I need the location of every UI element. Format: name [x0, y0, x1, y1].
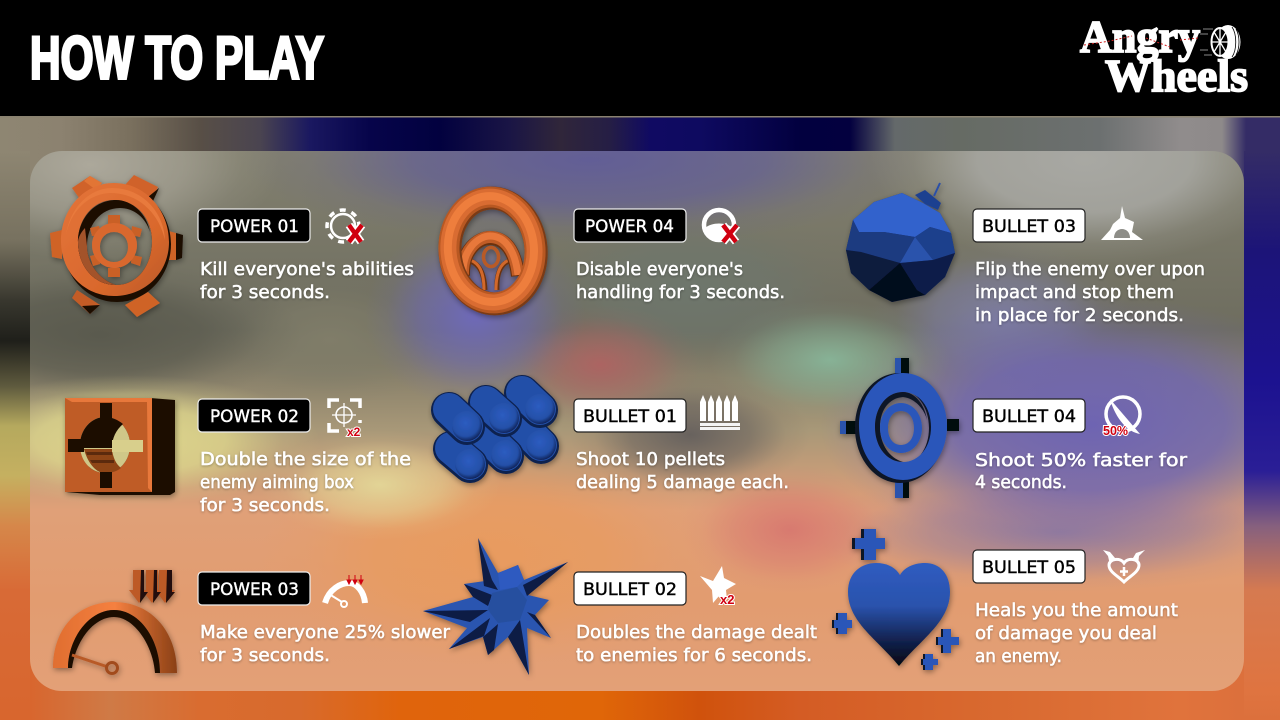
description: for 3 seconds. — [200, 496, 330, 516]
3D icon: pellets — [449, 392, 556, 479]
description: 4 seconds. — [975, 473, 1067, 493]
description: enemy aiming box — [200, 473, 354, 493]
description — [975, 451, 1188, 493]
label: BULLET 02 — [574, 572, 686, 605]
label: BULLET 05: BULLET 05 — [982, 558, 1076, 578]
item: BULLET 04 — [840, 358, 1188, 498]
label: BULLET 03 — [973, 209, 1085, 242]
description: Make everyone 25% slower — [200, 623, 451, 643]
small icon: fire rate 50%: 50% — [1103, 424, 1128, 438]
3D icon: crosshair — [840, 358, 959, 498]
label: POWER 04 — [574, 209, 686, 242]
label: BULLET 04: BULLET 04 — [982, 407, 1076, 427]
small icon: fire rate 50% — [1103, 397, 1140, 438]
description: in place for 2 seconds. — [975, 306, 1184, 326]
logo: Angry Wheels: Wheels — [1105, 50, 1248, 101]
background: right strip — [1244, 151, 1280, 720]
description — [200, 260, 414, 303]
translucent content panel — [30, 151, 1244, 691]
3D icon: aim box — [65, 398, 175, 495]
description: Doubles the damage dealt — [576, 623, 817, 643]
small icon: impact explosion — [1101, 206, 1143, 240]
header bar — [0, 0, 1280, 116]
description: Shoot 10 pellets — [576, 450, 725, 470]
item: POWER 04 — [443, 193, 785, 307]
description: Flip the enemy over upon — [975, 260, 1205, 280]
description — [576, 260, 785, 303]
label: POWER 03 — [198, 572, 310, 605]
description — [576, 623, 817, 666]
label: POWER 01 — [198, 209, 310, 242]
label: BULLET 01: BULLET 01 — [583, 407, 677, 427]
description — [200, 623, 451, 666]
label: BULLET 03: BULLET 03 — [982, 217, 1076, 237]
background: top strip — [0, 117, 1280, 187]
item: BULLET 02 — [423, 538, 817, 675]
label: POWER 02 — [198, 399, 310, 432]
3D icon: gear — [50, 175, 183, 317]
3D icon: heart with pluses — [832, 529, 959, 670]
background: left strip — [0, 151, 30, 720]
label: BULLET 01 — [574, 399, 686, 432]
small icon: doubled aim box: x2 — [347, 425, 361, 439]
small icon: disabled gear — [327, 210, 362, 242]
background: bottom strip — [30, 655, 1244, 720]
item: BULLET 01 — [449, 392, 789, 493]
3D icon: bomb — [846, 183, 955, 302]
3D icon: speedometer with arrows — [53, 570, 177, 674]
description — [975, 260, 1205, 326]
label: POWER 01: POWER 01 — [210, 217, 299, 237]
description: for 3 seconds. — [200, 646, 330, 666]
item: POWER 03 — [53, 570, 451, 674]
description: for 3 seconds. — [200, 283, 330, 303]
3D icon: steering wheel — [443, 193, 541, 307]
description: impact and stop them — [975, 283, 1174, 303]
description — [200, 450, 411, 516]
description: Disable everyone's — [576, 260, 743, 280]
item: POWER 01 — [50, 175, 414, 317]
logo: Angry Wheels: Angry — [1080, 12, 1200, 62]
label: BULLET 02: BULLET 02 — [583, 580, 677, 600]
3D icon: spiked star — [423, 538, 568, 675]
logo: Angry Wheels — [1080, 12, 1248, 101]
small icon: ten bullets — [700, 395, 740, 430]
label: POWER 04: POWER 04 — [585, 217, 674, 237]
description: Shoot 50% faster for — [975, 451, 1188, 471]
description: to enemies for 6 seconds. — [576, 646, 812, 666]
title: HOW TO PLAY — [30, 24, 324, 92]
label: BULLET 04 — [973, 399, 1085, 432]
label: BULLET 05 — [973, 550, 1085, 583]
small icon: doubled damage burst: x2 — [720, 592, 734, 607]
small icon: disabled steering wheel — [704, 210, 737, 242]
item: BULLET 03 — [846, 183, 1205, 326]
label: POWER 03: POWER 03 — [210, 580, 299, 600]
description: Heals you the amount — [975, 601, 1178, 621]
small icon: bat-winged heart — [1103, 550, 1145, 582]
description — [975, 601, 1178, 667]
description: of damage you deal — [975, 624, 1157, 644]
small icon: slow meter — [325, 575, 365, 607]
description — [576, 450, 789, 493]
label: POWER 02: POWER 02 — [210, 407, 299, 427]
description: an enemy. — [975, 647, 1062, 667]
description: Double the size of the — [200, 450, 411, 470]
description: dealing 5 damage each. — [576, 473, 789, 493]
item: POWER 02 — [65, 398, 411, 516]
small icon: doubled damage burst — [700, 566, 736, 607]
small icon: doubled aim box — [329, 400, 361, 439]
item: BULLET 05 — [832, 529, 1178, 670]
description: Kill everyone's abilities — [200, 260, 414, 280]
description: handling for 3 seconds. — [576, 283, 785, 303]
